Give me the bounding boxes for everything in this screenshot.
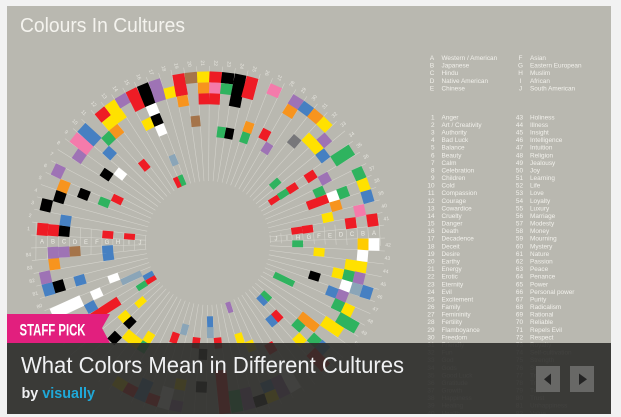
legend: meanings 1 to 42: Cold bbox=[442, 183, 455, 190]
column letters left: E bbox=[84, 240, 88, 246]
radial colour chart bbox=[25, 60, 391, 417]
legend: meanings 1 to 42: Deceit bbox=[442, 243, 460, 250]
legend: meanings 43 to 84: Modesty bbox=[530, 221, 555, 228]
legend: meanings 1 to 42: 24 bbox=[427, 289, 435, 296]
legend: meanings 1 to 42: Healing bbox=[442, 403, 464, 410]
legend: meanings 43 to 84: Trouble bbox=[530, 380, 552, 387]
legend: meanings 1 to 42: 12 bbox=[427, 198, 435, 205]
row numbers: 17 bbox=[147, 69, 154, 76]
legend: culture letters: A bbox=[430, 55, 435, 62]
legend: culture letters: Hindu bbox=[442, 70, 459, 77]
legend: meanings 43 to 84: Passion bbox=[530, 259, 553, 266]
legend: meanings 1 to 42: Fertility bbox=[442, 319, 463, 326]
dark caption bar bbox=[7, 343, 611, 414]
legend: meanings 43 to 84: 47 bbox=[516, 145, 523, 152]
column letters left: D bbox=[73, 240, 78, 246]
row numbers: 14 bbox=[111, 85, 119, 93]
legend: meanings 1 to 42: 33 bbox=[427, 357, 435, 364]
legend: culture letters bbox=[430, 55, 582, 92]
legend: meanings 1 to 42: 7 bbox=[431, 160, 435, 167]
legend: meanings 43 to 84: Rational bbox=[530, 312, 553, 319]
legend: meanings 1 to 42: 9 bbox=[431, 175, 435, 182]
legend: meanings 1 to 42: Cowardice bbox=[442, 205, 472, 212]
row numbers: 18 bbox=[160, 65, 167, 72]
legend: meanings 1 to 42: Decadence bbox=[442, 236, 474, 243]
legend: meanings 43 to 84: Insight bbox=[530, 129, 549, 136]
legend: meanings 43 to 84: Holiness bbox=[530, 114, 555, 121]
row numbers: 33 bbox=[340, 120, 348, 129]
legend: culture letters: F bbox=[519, 55, 523, 62]
legend: meanings 1 to 42: 3 bbox=[431, 129, 435, 136]
column letters right: J bbox=[274, 237, 278, 243]
legend: meanings 43 to 84: Power bbox=[530, 281, 549, 288]
legend: meanings 43 to 84: Trust bbox=[530, 395, 545, 402]
legend: meanings 43 to 84: 56 bbox=[516, 213, 523, 220]
row numbers: 40 bbox=[381, 203, 388, 210]
legend: meanings 43 to 84: 53 bbox=[516, 190, 523, 197]
row numbers: 24 bbox=[238, 63, 245, 70]
row numbers: 39 bbox=[378, 190, 385, 197]
legend: meanings 43 to 84: Royalty bbox=[530, 342, 552, 349]
row numbers: 84 bbox=[25, 252, 32, 258]
legend: meanings 43 to 84: 54 bbox=[516, 198, 523, 205]
legend: meanings 43 to 84: 67 bbox=[516, 296, 523, 303]
legend: culture letters: Asian bbox=[530, 55, 546, 62]
column letters left: A bbox=[40, 240, 44, 246]
row numbers: 16 bbox=[134, 73, 142, 81]
column letters right: I bbox=[286, 236, 288, 242]
column letters right: C bbox=[350, 232, 355, 238]
legend: meanings 43 to 84: Repels Evil bbox=[530, 327, 562, 334]
legend: meanings 1 to 42: God bbox=[442, 357, 454, 364]
row numbers: 42 bbox=[385, 243, 391, 249]
legend: culture letters: African bbox=[530, 78, 550, 85]
legend: meanings 1 to 42: Growth bbox=[442, 388, 463, 395]
legend: meanings 1 to 42: 31 bbox=[427, 342, 435, 349]
row numbers: 19 bbox=[172, 63, 179, 69]
legend: meanings 43 to 84: Strength bbox=[530, 357, 555, 364]
legend: meanings 43 to 84: Reliable bbox=[530, 319, 554, 326]
legend: meanings 43 to 84: 58 bbox=[516, 228, 523, 235]
legend: meanings 43 to 84: Life bbox=[530, 183, 541, 190]
legend: meanings 43 to 84: Joy bbox=[530, 167, 541, 174]
row numbers: 27 bbox=[275, 74, 283, 81]
legend: meanings 1 to 42: Freedom bbox=[442, 334, 467, 341]
legend: meanings 1 to 42: Courage bbox=[442, 198, 466, 205]
legend: meanings 1 to 42: Femininity bbox=[442, 312, 471, 319]
row numbers: 83 bbox=[27, 265, 33, 272]
column letters right: G bbox=[307, 235, 312, 241]
legend: meanings 1 to 42: 17 bbox=[427, 236, 435, 243]
legend: meanings 1 to 42: 4 bbox=[431, 137, 435, 144]
row numbers: 37 bbox=[368, 165, 376, 173]
legend: meanings 43 to 84: 68 bbox=[516, 304, 523, 311]
legend: meanings 43 to 84: 80 bbox=[516, 395, 523, 402]
row numbers: 23 bbox=[225, 61, 232, 67]
legend: meanings 43 to 84: 55 bbox=[516, 205, 523, 212]
legend: culture letters: Japanese bbox=[442, 63, 470, 70]
row numbers: 32 bbox=[331, 111, 339, 119]
legend: meanings 43 to 84: 44 bbox=[516, 122, 523, 129]
column letters right: E bbox=[328, 233, 332, 239]
legend: meanings 43 to 84: Mourning bbox=[530, 236, 557, 243]
legend: culture letters: B bbox=[430, 63, 434, 70]
legend: meanings 43 to 84: 57 bbox=[516, 221, 523, 228]
column letters left: C bbox=[62, 240, 67, 246]
caption title: What Colors Mean in Different Cultures bbox=[21, 352, 404, 378]
row numbers: 36 bbox=[362, 153, 370, 161]
legend: meanings 1 to 42: 36 bbox=[427, 380, 435, 387]
legend: meanings 1 to 42: Family bbox=[442, 304, 461, 311]
legend: meanings 43 to 84: Personal power bbox=[530, 289, 575, 296]
legend: meanings 1 to 42: 18 bbox=[427, 243, 435, 250]
legend: culture letters: H bbox=[518, 70, 523, 77]
legend: meanings 43 to 84: 63 bbox=[516, 266, 523, 273]
title: Colours In Cultures bbox=[20, 15, 185, 37]
legend: meanings 1 to 42: Eternity bbox=[442, 281, 464, 288]
legend: meanings 43 to 84: Jealousy bbox=[530, 160, 556, 167]
staff pick badge bbox=[7, 314, 110, 343]
legend: meanings 1 to 42: 38 bbox=[427, 395, 435, 402]
legend: meanings 1 to 42: 16 bbox=[427, 228, 435, 235]
legend: meanings 1 to 42: 32 bbox=[427, 350, 435, 357]
legend: meanings 1 to 42: Gratitude bbox=[442, 380, 468, 387]
legend: meanings 43 to 84: 43 bbox=[516, 114, 523, 121]
legend: meanings 1 to 42: Bad Luck bbox=[442, 137, 469, 144]
legend: meanings 43 to 84: 70 bbox=[516, 319, 523, 326]
legend: meanings 1 to 42: Good Luck bbox=[442, 372, 473, 379]
legend: meanings 43 to 84 bbox=[516, 114, 575, 417]
row numbers: 26 bbox=[263, 69, 270, 77]
legend: meanings 43 to 84: Purity bbox=[530, 296, 547, 303]
column letters right bbox=[274, 231, 376, 243]
column letters left: J bbox=[138, 240, 142, 246]
row numbers: 81 bbox=[32, 290, 39, 298]
legend: meanings 43 to 84: 79 bbox=[516, 388, 523, 395]
legend: meanings 1 to 42: 6 bbox=[431, 152, 435, 159]
legend: meanings 1 to 42: 30 bbox=[427, 334, 435, 341]
legend: meanings 1 to 42: Excitement bbox=[442, 296, 473, 303]
column letters left: F bbox=[95, 240, 99, 246]
row numbers: 1 bbox=[27, 226, 30, 232]
row numbers: 4 bbox=[34, 187, 38, 194]
legend: meanings 1 to 42: 11 bbox=[428, 190, 435, 197]
legend: meanings 1 to 42: Erotic bbox=[442, 274, 459, 281]
legend: meanings 43 to 84: Unhappiness bbox=[530, 403, 567, 410]
legend: meanings 43 to 84: 65 bbox=[516, 281, 523, 288]
legend: meanings 1 to 42: 8 bbox=[431, 167, 435, 174]
legend: culture letters: C bbox=[430, 70, 435, 77]
legend: meanings 43 to 84: Love bbox=[530, 190, 544, 197]
legend: meanings 43 to 84: Tranquility bbox=[530, 372, 560, 379]
legend: meanings 43 to 84: 64 bbox=[516, 274, 523, 281]
row numbers: 9 bbox=[63, 129, 69, 136]
legend: meanings 1 to 42: 20 bbox=[427, 259, 435, 266]
legend: culture letters: South American bbox=[530, 85, 576, 92]
legend: meanings 43 to 84: 52 bbox=[516, 183, 523, 190]
row numbers: 11 bbox=[79, 109, 87, 117]
legend: culture letters: G bbox=[518, 63, 523, 70]
legend: meanings 1 to 42: 21 bbox=[427, 266, 435, 273]
row numbers: 28 bbox=[289, 80, 297, 88]
row numbers: 21 bbox=[199, 60, 205, 66]
legend: meanings 1 to 42: Calm bbox=[442, 160, 456, 167]
row numbers: 47 bbox=[371, 306, 379, 314]
legend: culture letters: D bbox=[430, 78, 435, 85]
legend: meanings 1 to 42: Earthy bbox=[442, 259, 461, 266]
bottom page strip bbox=[0, 414, 621, 417]
legend: meanings 1 to 42: 23 bbox=[427, 281, 435, 288]
row numbers: 7 bbox=[49, 151, 54, 158]
legend: meanings 1 to 42: 27 bbox=[427, 312, 435, 319]
row numbers: 2 bbox=[28, 213, 32, 219]
legend: meanings 1 to 42: 29 bbox=[427, 327, 435, 334]
legend: meanings 1 to 42: 22 bbox=[427, 274, 435, 281]
legend: meanings 43 to 84: 78 bbox=[516, 380, 523, 387]
column letters left: G bbox=[105, 240, 110, 246]
legend: meanings 1 to 42: Desire bbox=[442, 251, 460, 258]
row numbers: 12 bbox=[89, 100, 97, 109]
legend: meanings 1 to 42: Danger bbox=[442, 221, 463, 228]
legend: meanings 43 to 84: Respect bbox=[530, 334, 554, 341]
legend: meanings 43 to 84: Learning bbox=[530, 175, 555, 182]
row numbers: 35 bbox=[356, 142, 364, 150]
legend: meanings 1 to 42: Art / Creativity bbox=[442, 122, 482, 129]
legend: culture letters: Western / American bbox=[442, 55, 498, 62]
row numbers: 25 bbox=[250, 65, 258, 73]
legend: meanings 43 to 84: 48 bbox=[516, 152, 523, 159]
legend: meanings 43 to 84: 62 bbox=[516, 259, 523, 266]
row numbers: 29 bbox=[300, 87, 308, 95]
legend: meanings 1 to 42: 1 bbox=[431, 114, 435, 121]
row numbers: 10 bbox=[70, 118, 79, 127]
legend: culture letters: J bbox=[519, 85, 522, 92]
legend: meanings 43 to 84: 60 bbox=[516, 243, 523, 250]
legend: meanings 43 to 84: Luxury bbox=[530, 205, 550, 212]
legend: meanings 1 to 42: Cruelty bbox=[442, 213, 463, 220]
legend: meanings 43 to 84: 66 bbox=[516, 289, 523, 296]
row numbers: 8 bbox=[55, 140, 61, 147]
legend: meanings 1 to 42: Death bbox=[442, 228, 459, 235]
legend: meanings 43 to 84: 72 bbox=[516, 334, 523, 341]
legend: meanings 1 to 42: 26 bbox=[427, 304, 435, 311]
column letters left: B bbox=[51, 240, 55, 246]
legend: meanings 1 to 42: 2 bbox=[431, 122, 435, 129]
legend: culture letters: Eastern European bbox=[530, 63, 582, 70]
legend: meanings 1 to 42: Fun bbox=[442, 350, 453, 357]
legend: meanings 1 to 42: 37 bbox=[427, 388, 435, 395]
row numbers: 30 bbox=[311, 94, 319, 102]
row numbers: 22 bbox=[212, 60, 218, 66]
row numbers: 43 bbox=[384, 256, 391, 262]
row numbers: 3 bbox=[30, 200, 35, 206]
legend: meanings 1 to 42: 14 bbox=[427, 213, 435, 220]
legend: meanings 43 to 84: Intelligence bbox=[530, 137, 563, 144]
row numbers: 34 bbox=[348, 131, 356, 139]
legend: meanings 1 to 42: 39 bbox=[427, 403, 435, 410]
row numbers: 44 bbox=[382, 268, 389, 275]
row numbers: 79 bbox=[41, 315, 49, 322]
legend: meanings 1 to 42: Evil bbox=[442, 289, 452, 296]
row numbers: 82 bbox=[29, 278, 36, 285]
legend: meanings 1 to 42: Children bbox=[442, 175, 466, 182]
legend: meanings 43 to 84: 76 bbox=[516, 365, 523, 372]
colour cells by meaning and culture bbox=[37, 71, 380, 414]
legend: meanings 1 to 42 bbox=[427, 114, 482, 417]
legend: meanings 1 to 42: 19 bbox=[427, 251, 435, 258]
row numbers bbox=[25, 60, 391, 349]
legend: meanings 43 to 84: Loyalty bbox=[530, 198, 551, 205]
legend: meanings 43 to 84: 73 bbox=[516, 342, 523, 349]
legend: meanings 43 to 84: Money bbox=[530, 228, 550, 235]
legend: meanings 1 to 42: 35 bbox=[427, 372, 435, 379]
legend: meanings 43 to 84: Marriage bbox=[530, 213, 556, 220]
column letters left bbox=[40, 240, 142, 246]
legend: culture letters: Native American bbox=[442, 78, 488, 85]
row numbers: 5 bbox=[38, 175, 43, 182]
legend: meanings 43 to 84: 49 bbox=[516, 160, 523, 167]
legend: meanings 1 to 42: Energy bbox=[442, 266, 463, 273]
legend: meanings 1 to 42: Anger bbox=[442, 114, 459, 121]
legend: meanings 1 to 42: Compassion bbox=[442, 190, 477, 197]
column letters right: B bbox=[361, 231, 365, 237]
legend: meanings 43 to 84: 81 bbox=[516, 403, 523, 410]
legend: meanings 43 to 84: 77 bbox=[516, 372, 523, 379]
row numbers: 80 bbox=[36, 303, 43, 310]
row numbers: 13 bbox=[100, 92, 108, 100]
legend: meanings 43 to 84: 75 bbox=[516, 357, 523, 364]
legend: culture letters: Chinese bbox=[442, 85, 465, 92]
row numbers: 45 bbox=[380, 281, 387, 288]
row numbers: 50 bbox=[353, 340, 361, 349]
legend: meanings 1 to 42: 34 bbox=[427, 365, 435, 372]
legend: meanings 43 to 84: Self-cultivation bbox=[530, 350, 572, 357]
legend: meanings 1 to 42: Flamboyance bbox=[442, 327, 480, 334]
legend: meanings 1 to 42: Celebration bbox=[442, 167, 475, 174]
row numbers: 49 bbox=[360, 329, 368, 337]
row numbers: 20 bbox=[186, 61, 192, 67]
legend: meanings 1 to 42: Authority bbox=[442, 129, 468, 136]
legend: meanings 43 to 84: 74 bbox=[516, 350, 523, 357]
row numbers: 48 bbox=[366, 318, 374, 326]
legend: meanings 43 to 84: 50 bbox=[516, 167, 523, 174]
legend: meanings 43 to 84: 71 bbox=[516, 327, 523, 334]
row numbers: 31 bbox=[321, 102, 329, 110]
row numbers: 38 bbox=[373, 177, 381, 185]
legend: meanings 43 to 84: Peace bbox=[530, 266, 549, 273]
byline: by visually bbox=[22, 386, 95, 402]
legend: meanings 43 to 84: 69 bbox=[516, 312, 523, 319]
legend: meanings 43 to 84: Penance bbox=[530, 274, 556, 281]
legend: culture letters: E bbox=[430, 85, 434, 92]
legend: meanings 1 to 42: Balance bbox=[442, 145, 465, 152]
column letters left: H bbox=[116, 240, 120, 246]
column letters left: I bbox=[128, 240, 130, 246]
row numbers: 46 bbox=[376, 294, 383, 301]
legend: culture letters: I bbox=[520, 78, 522, 85]
legend: meanings 43 to 84: Success bbox=[530, 365, 554, 372]
legend: meanings 43 to 84: 46 bbox=[516, 137, 523, 144]
legend: meanings 43 to 84: 61 bbox=[516, 251, 523, 258]
legend: meanings 1 to 42: Happiness bbox=[442, 395, 472, 402]
legend: meanings 1 to 42: Friendly bbox=[442, 342, 465, 349]
legend: meanings 1 to 42: Beauty bbox=[442, 152, 462, 159]
next button bbox=[570, 366, 594, 392]
column letters right: F bbox=[317, 234, 321, 240]
row numbers: 41 bbox=[383, 216, 390, 223]
legend: meanings 1 to 42: 13 bbox=[427, 205, 435, 212]
legend: meanings 43 to 84: Religion bbox=[530, 152, 554, 159]
row numbers: 15 bbox=[122, 79, 130, 87]
column letters right: H bbox=[296, 235, 300, 241]
column letters right: A bbox=[372, 231, 376, 237]
legend: meanings 43 to 84: Nature bbox=[530, 251, 550, 258]
previous button bbox=[536, 366, 560, 392]
legend: meanings 43 to 84: Truth bbox=[530, 388, 545, 395]
legend: meanings 43 to 84: Radicalism bbox=[530, 304, 561, 311]
column letters right: D bbox=[339, 233, 344, 239]
legend: meanings 43 to 84: Illness bbox=[530, 122, 548, 129]
row numbers: 6 bbox=[43, 163, 48, 170]
legend: meanings 43 to 84: 45 bbox=[516, 129, 523, 136]
legend: meanings 1 to 42: 28 bbox=[427, 319, 435, 326]
legend: meanings 43 to 84: Mystery bbox=[530, 243, 553, 250]
legend: meanings 1 to 42: 10 bbox=[427, 183, 435, 190]
staff pick badge: STAFF PICK bbox=[20, 320, 86, 340]
legend: culture letters: Muslim bbox=[530, 70, 550, 77]
legend: meanings 1 to 42: 15 bbox=[427, 221, 435, 228]
legend: meanings 43 to 84: 59 bbox=[516, 236, 523, 243]
legend: meanings 1 to 42: Gods bbox=[442, 365, 457, 372]
legend: meanings 43 to 84: Intuition bbox=[530, 145, 553, 152]
legend: meanings 1 to 42: 5 bbox=[431, 145, 435, 152]
legend: meanings 43 to 84: 51 bbox=[516, 175, 523, 182]
legend: meanings 1 to 42: 25 bbox=[427, 296, 435, 303]
